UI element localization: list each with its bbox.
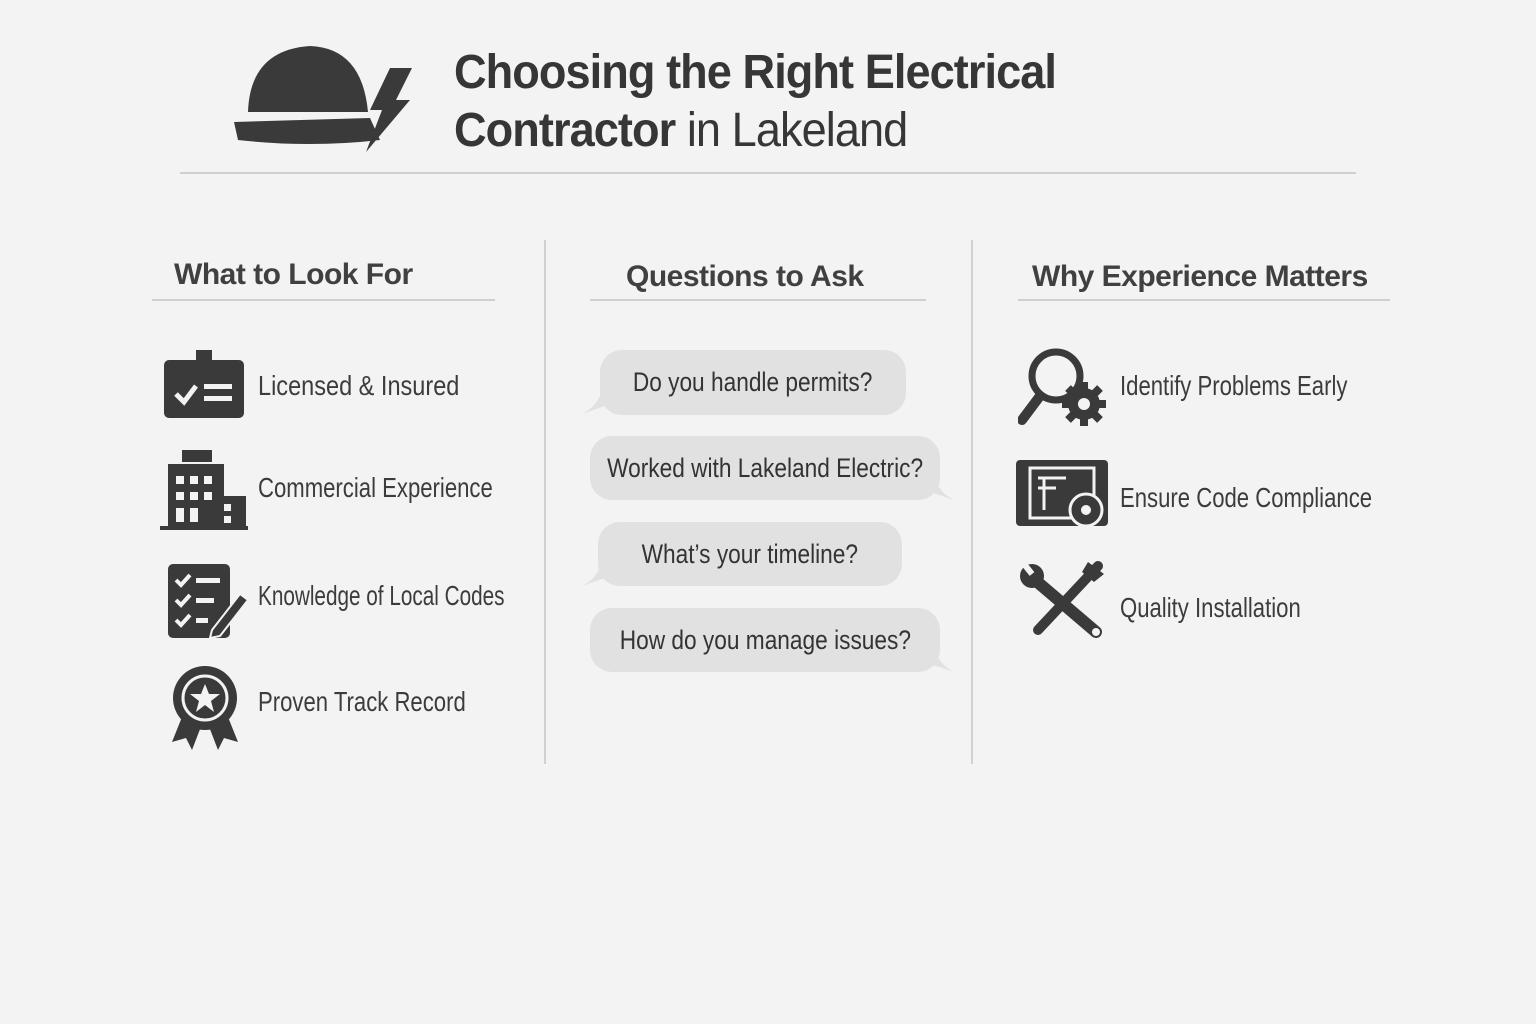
heading: what to look for: What to Look For: [174, 258, 413, 291]
title: [454, 46, 1056, 157]
item: licensed: Licensed & Insured: [258, 370, 459, 401]
item: code compliance: [1016, 460, 1372, 526]
item: quality installation: [1020, 561, 1301, 638]
bubble 2: Worked with Lakeland Electric?: [607, 452, 923, 482]
item: track record: Proven Track Record: [258, 686, 466, 717]
item: quality installation: Quality Installation: [1120, 592, 1301, 623]
panel: what to look for: [152, 258, 505, 750]
item: commercial: [160, 450, 493, 530]
title: Choosing the Right Electrical: [454, 46, 1056, 99]
item: codes: [168, 564, 505, 638]
icon: helmet with lightning: [234, 46, 412, 152]
item: codes: Knowledge of Local Codes: [258, 580, 505, 611]
item: identify problems: Identify Problems Early: [1120, 370, 1347, 401]
bubble 4: [590, 608, 952, 672]
bubble 1: Do you handle permits?: [633, 367, 873, 397]
bubble 4: How do you manage issues?: [619, 624, 911, 654]
panel: why experience matters: [1016, 260, 1390, 638]
heading: questions to ask: Questions to Ask: [626, 260, 864, 293]
item: code compliance: Ensure Code Compliance: [1120, 482, 1372, 513]
item: track record: [172, 666, 466, 750]
title: Contractor in Lakeland: [454, 104, 907, 157]
bubble 3: What’s your timeline?: [642, 538, 858, 568]
bubble 3: [584, 522, 902, 586]
bubble 2: [590, 436, 952, 500]
heading: why experience matters: Why Experience Matters: [1032, 260, 1368, 293]
bubble 1: [584, 350, 906, 415]
item: licensed: [164, 350, 459, 418]
panel: questions to ask: [584, 260, 952, 672]
item: commercial: Commercial Experience: [258, 472, 493, 503]
item: identify problems: [1018, 348, 1348, 426]
